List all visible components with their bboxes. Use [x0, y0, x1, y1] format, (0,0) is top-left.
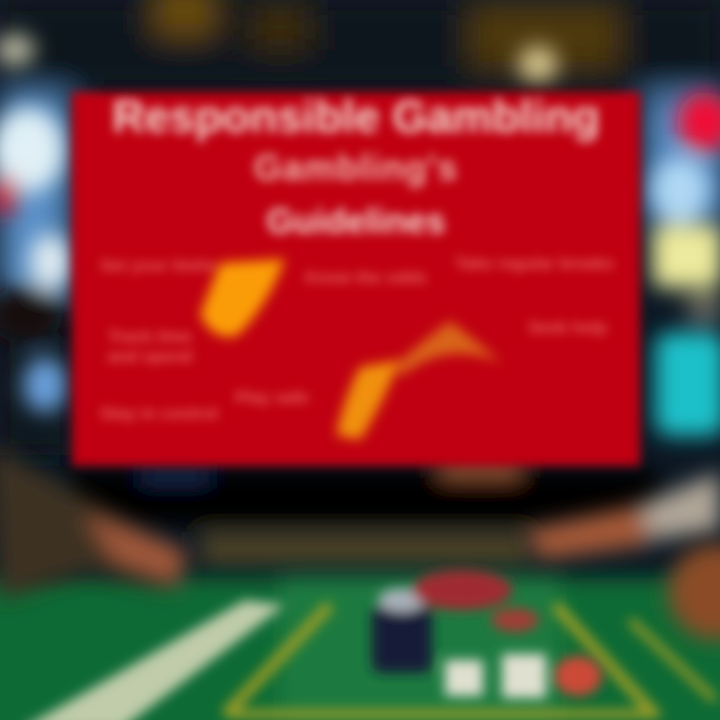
green felt table — [0, 575, 720, 720]
dark band and table edge — [70, 456, 660, 566]
panel: red infographic board — [72, 92, 640, 466]
title: Responsible Gambling — [112, 91, 600, 142]
table markings — [20, 600, 715, 720]
text block: top right: Take regular breaks — [455, 254, 614, 273]
chips and cards — [372, 570, 602, 698]
text block: middle right: Seek help — [528, 318, 607, 337]
text block: middle left: and spend — [107, 347, 192, 366]
subtitle: Gambling's — [254, 147, 458, 188]
icon: orange tilted card — [192, 250, 291, 346]
arms and hands — [0, 445, 720, 600]
text block: middle left — [104, 326, 196, 368]
arrow: orange curved trend arrow — [329, 316, 501, 448]
text block: top centre: Know the odds — [305, 268, 427, 287]
text block: top left: Set your limits — [100, 256, 217, 275]
text block: lower centre: Play safe — [235, 388, 309, 407]
text block: lower left: Stay in control — [100, 404, 218, 423]
orange ball — [668, 544, 720, 640]
subtitle line 2: Guidelines — [267, 202, 445, 241]
text block: middle left: Track time — [108, 327, 192, 346]
